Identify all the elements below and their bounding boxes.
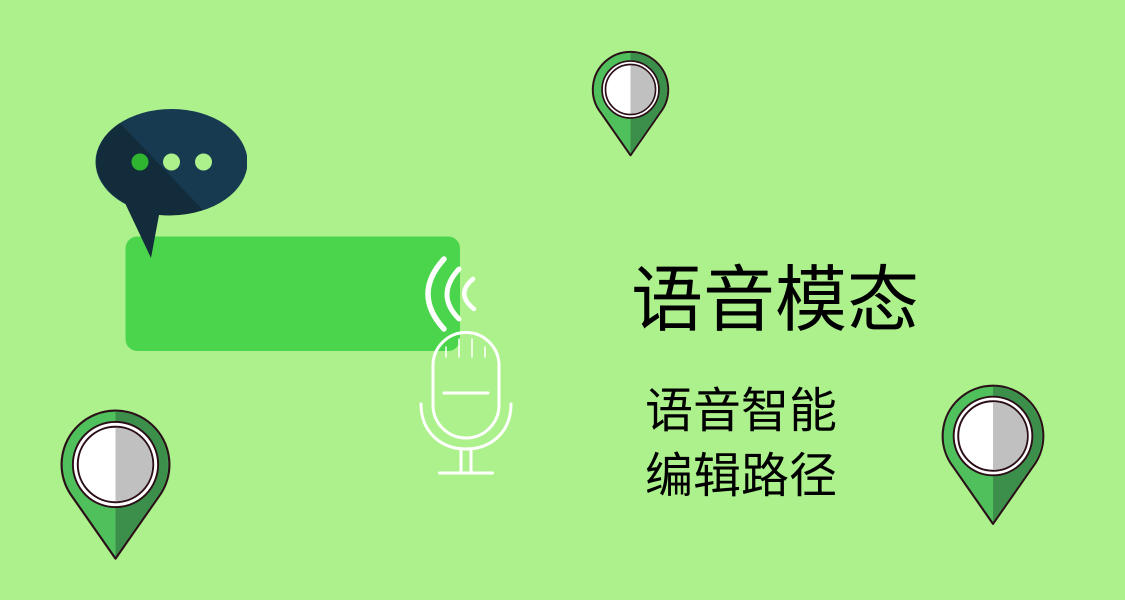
subtitle line: voice intelligence: 语音智能 xyxy=(645,385,837,438)
icon: map pin left xyxy=(62,411,169,559)
subtitle line: edit path: 编辑路径 xyxy=(645,450,837,503)
icon: speech bubble xyxy=(96,109,248,258)
icon: map pin top xyxy=(593,52,668,155)
icon: microphone xyxy=(421,332,511,473)
icon: map pin right xyxy=(943,386,1043,524)
title: 语音模态 xyxy=(631,261,919,341)
green message bar xyxy=(126,236,460,351)
icon: sound waves xyxy=(428,259,474,329)
